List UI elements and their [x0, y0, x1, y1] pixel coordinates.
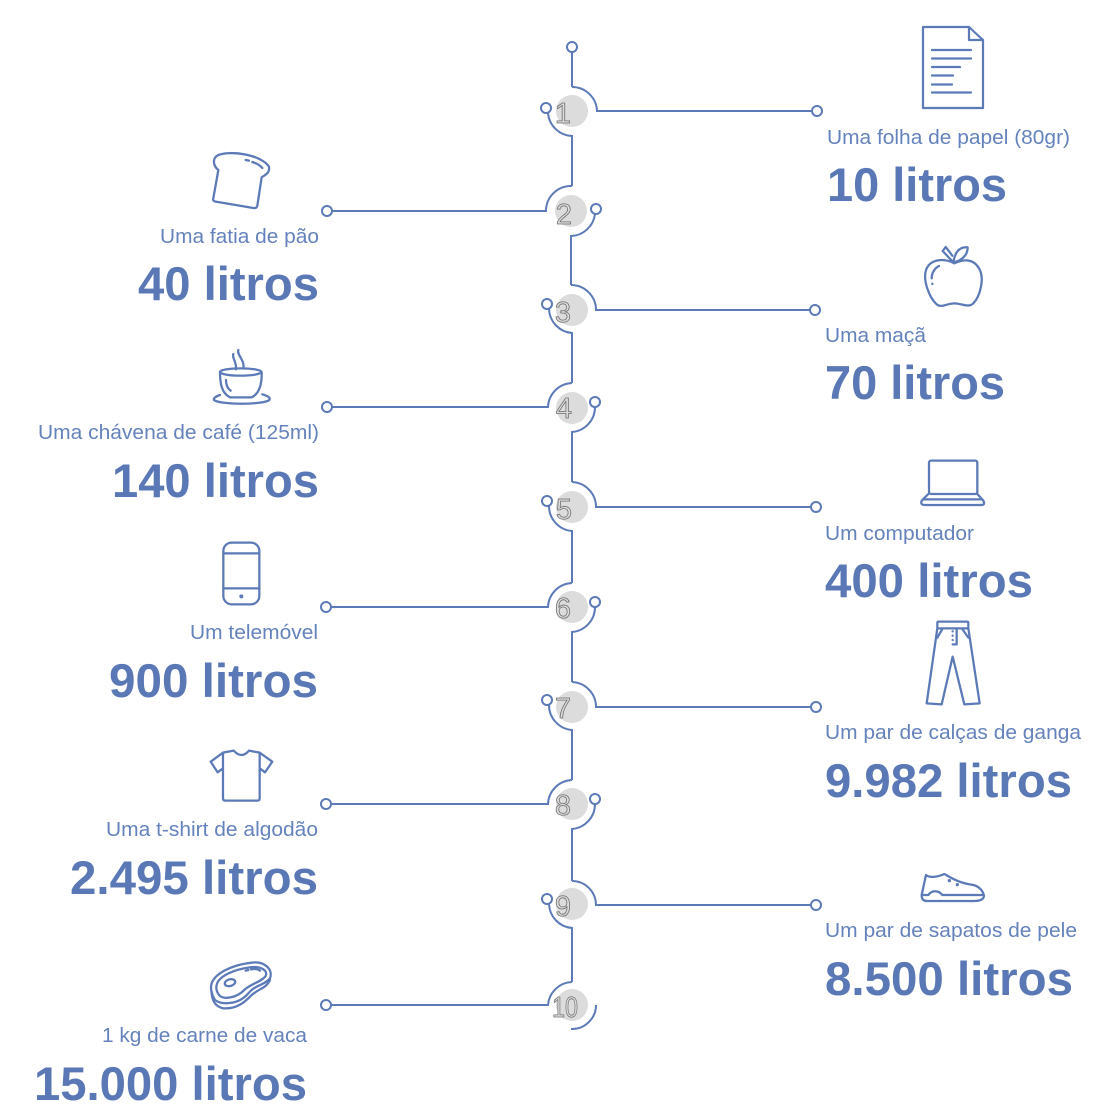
- node 4: [322, 383, 600, 482]
- value: 900 litros: 900 litros: [109, 654, 318, 707]
- icon: apple: [925, 247, 982, 306]
- value: 400 litros: 400 litros: [825, 554, 1033, 607]
- node 9: 9: [555, 891, 571, 923]
- label: jeans: Um par de calças de ganga: [825, 722, 1082, 744]
- label: computer: Um computador: [825, 523, 974, 545]
- node 7: [542, 682, 821, 780]
- label: sheet of paper: Uma folha de papel (80gr): [827, 127, 1070, 149]
- label: t-shirt: Uma t-shirt de algodão: [106, 819, 318, 841]
- node 7: 7: [555, 693, 571, 725]
- item 8: t-shirt: [70, 751, 318, 904]
- icon: t-shirt: [211, 751, 272, 801]
- item 3: apple: [825, 247, 1005, 409]
- node 3: [542, 285, 820, 383]
- central timeline: [321, 42, 822, 1029]
- item 10: beef: [34, 962, 308, 1110]
- label: beef: 1 kg de carne de vaca: [102, 1025, 308, 1047]
- node 3: 3: [555, 297, 571, 329]
- label: mobile phone: Um telemóvel: [190, 622, 318, 644]
- node 6: [321, 583, 600, 682]
- label: leather shoes: Um par de sapatos de pele: [825, 920, 1077, 942]
- node 2: 2: [556, 199, 572, 231]
- value: 8.500 litros: 8.500 litros: [825, 952, 1073, 1005]
- node 6: 6: [555, 593, 571, 625]
- node 10: [321, 982, 596, 1029]
- icon: document: [923, 27, 983, 108]
- item 1: sheet of paper: [827, 27, 1070, 211]
- icon: coffee cup: [214, 350, 270, 404]
- item 4: cup of coffee: [38, 350, 319, 507]
- value: 40 litros: 40 litros: [138, 257, 319, 310]
- value: 140 litros: 140 litros: [112, 454, 319, 507]
- node 1: [541, 87, 822, 186]
- node 9: [542, 881, 821, 982]
- value: 70 litros: 70 litros: [825, 356, 1005, 409]
- node 10: 10: [552, 992, 578, 1024]
- item 6: mobile phone: [109, 543, 318, 707]
- item 5: computer: [825, 461, 1033, 607]
- label: cup of coffee: Uma chávena de café (125ml): [38, 422, 319, 444]
- icon: laptop: [921, 461, 984, 505]
- label: slice of bread: Uma fatia de pão: [160, 226, 319, 248]
- item 9: leather shoes: [825, 874, 1077, 1005]
- node 8: 8: [555, 790, 571, 822]
- value: 2.495 litros: 2.495 litros: [70, 851, 318, 904]
- label: apple: Uma maçã: [825, 325, 927, 347]
- node 5: [542, 482, 821, 583]
- item 7: jeans: [825, 622, 1082, 807]
- value: 15.000 litros: 15.000 litros: [34, 1057, 307, 1110]
- icon: bread: [213, 153, 269, 208]
- node 2: [322, 186, 601, 285]
- item 2: slice of bread: [138, 153, 319, 310]
- icon: shoe: [922, 874, 984, 901]
- node 8: [321, 780, 600, 881]
- value: 10 litros: 10 litros: [827, 158, 1007, 211]
- icon: jeans: [927, 622, 980, 704]
- node 1: 1: [555, 98, 571, 130]
- icon: steak: [211, 962, 271, 1008]
- node 4: 4: [556, 393, 572, 425]
- node 5: 5: [556, 494, 572, 526]
- timeline start marker: [567, 42, 577, 87]
- value: 9.982 litros: 9.982 litros: [825, 754, 1072, 807]
- icon: phone: [223, 543, 259, 604]
